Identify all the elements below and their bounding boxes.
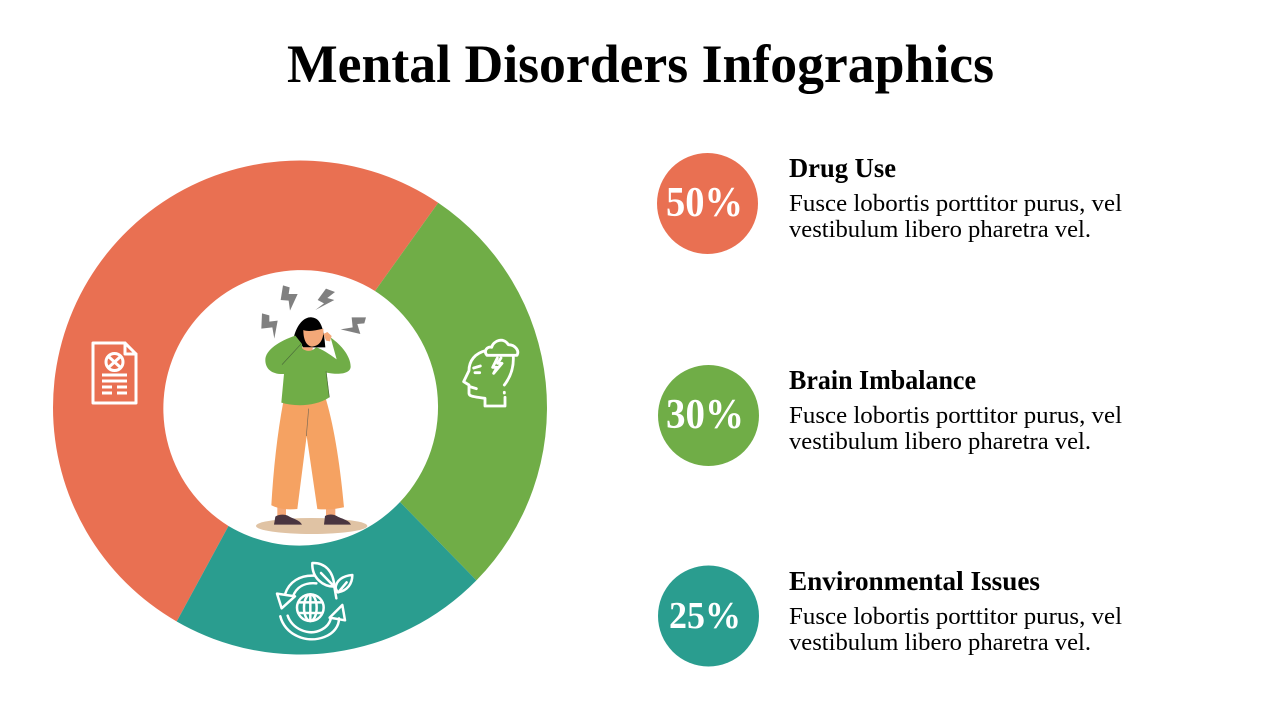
description: vestibulum libero pharetra vel. [789, 630, 1091, 656]
badge: 50% [657, 153, 758, 254]
description: Fusce lobortis porttitor purus, vel [789, 403, 1122, 429]
shoes [274, 515, 302, 525]
trousers [271, 399, 344, 509]
badge: 25% [658, 566, 759, 666]
description: vestibulum libero pharetra vel. [789, 217, 1091, 243]
value: 50%: 50% [666, 180, 743, 226]
raised hand [323, 332, 332, 341]
segment: brain imbalance 30% [375, 203, 547, 580]
heading: drug use: Drug Use [789, 153, 896, 183]
value: 25%: 25% [669, 595, 741, 637]
hair [294, 317, 325, 347]
badge: 30% [658, 365, 759, 466]
segment: drug use 50% [53, 161, 438, 621]
description [789, 604, 1122, 656]
description [789, 403, 1122, 455]
segment: environmental issues 25% [177, 502, 476, 654]
heading: environmental issues: Environmental Issues [789, 566, 1040, 596]
item: drug use [657, 153, 1122, 254]
item: environmental issues [658, 566, 1122, 666]
title: Mental Disorders Infographics [287, 34, 994, 94]
icon: head with storm cloud [464, 340, 518, 406]
icon: globe with recycling arrows and leaves [277, 563, 352, 639]
item: brain imbalance [658, 365, 1122, 466]
heading: brain imbalance: Brain Imbalance [789, 365, 976, 395]
description: Fusce lobortis porttitor purus, vel [789, 191, 1122, 217]
face [303, 329, 323, 347]
description: Fusce lobortis porttitor purus, vel [789, 604, 1122, 630]
donut chart [53, 161, 547, 654]
description: vestibulum libero pharetra vel. [789, 429, 1091, 455]
description [789, 191, 1122, 243]
sweater [265, 336, 351, 405]
ground shadow [256, 518, 367, 534]
illustration: stressed woman [256, 285, 367, 534]
icon: drug report document [93, 343, 136, 403]
lightning bolts [261, 285, 366, 339]
ankles [277, 507, 335, 517]
value: 30%: 30% [666, 392, 744, 438]
